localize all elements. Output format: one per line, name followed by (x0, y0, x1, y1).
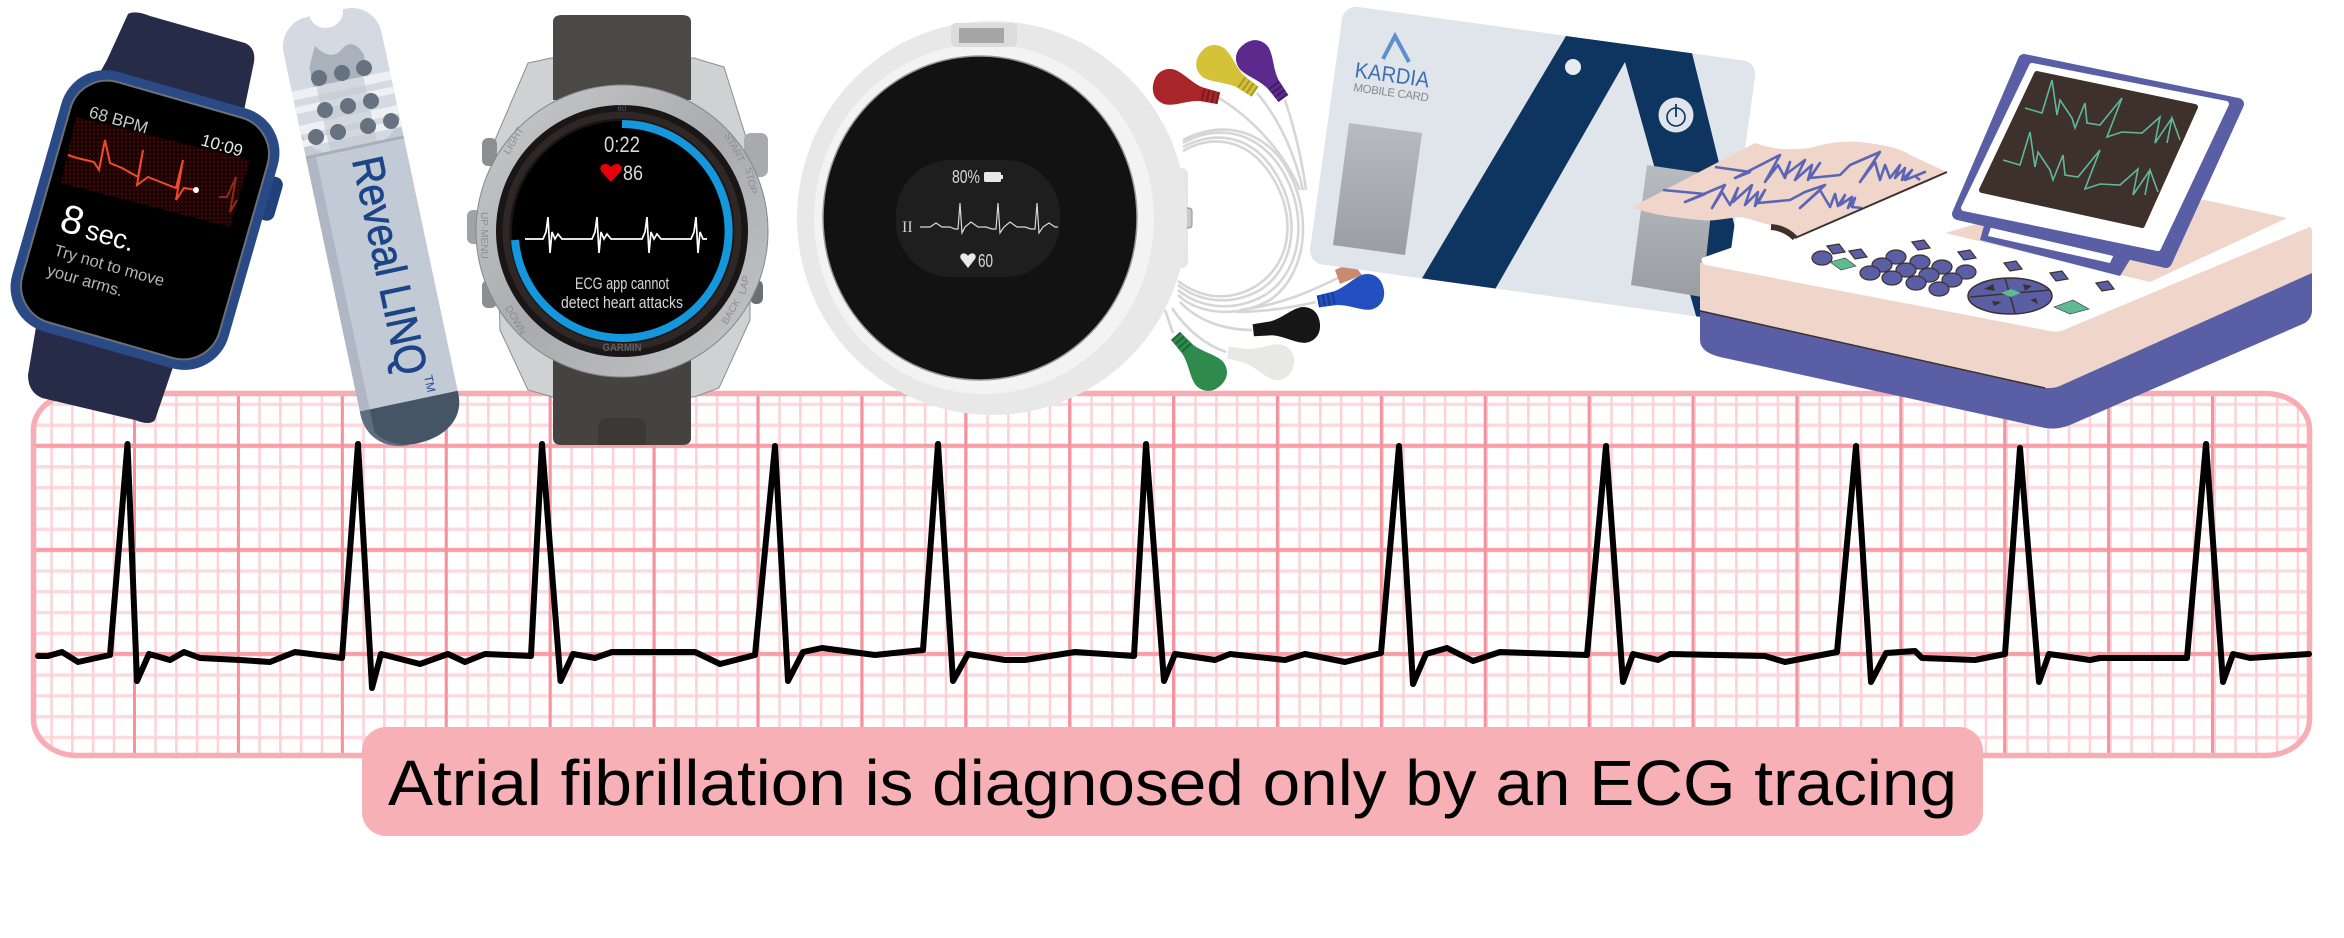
device: Garmin smartwatch: BACK (720, 297, 743, 326)
device: Kardia Mobile Card: MOBILE CARD (1353, 82, 1430, 105)
ECG trace: atrial fibrillation rhythm (38, 444, 2309, 688)
device: Garmin smartwatch: STOP (742, 166, 759, 195)
device: Apple Watch: sec. (82, 215, 138, 257)
device: Holter leads and cables (1149, 34, 1387, 398)
device: Garmin smartwatch: LAP (737, 274, 753, 296)
device: Garmin smartwatch: 0:22 (604, 132, 640, 157)
device: Garmin smartwatch: ECG app cannot (575, 274, 669, 293)
device: Garmin smartwatch: UP·MENU (478, 212, 489, 259)
device: Garmin smartwatch: 60 (618, 104, 627, 113)
lead: purple (1229, 34, 1298, 109)
green keys (1830, 258, 2089, 314)
lead: brown (1335, 262, 1362, 284)
device: round Holter ECG recorder (797, 21, 1192, 415)
printed paper (1632, 142, 1947, 238)
device: Garmin smartwatch: LIGHT (502, 125, 526, 156)
lead: black (1251, 305, 1322, 348)
caption: Atrial fibrillation is diagnosed only by an ECG tracing (388, 747, 1957, 819)
device: Reveal LINQ implantable monitor: TM (421, 374, 438, 394)
device: Reveal LINQ implantable monitor (277, 2, 467, 454)
device: Garmin smartwatch: GARMIN (602, 342, 642, 354)
device: Apple Watch: 8 (56, 196, 89, 245)
navigation dial (1968, 278, 2052, 314)
device: round Holter ECG recorder: 80% (952, 167, 980, 187)
lead: white (1224, 335, 1297, 383)
device: Garmin smartwatch: detect heart attacks (561, 293, 683, 312)
keypad (1812, 240, 2114, 296)
device: Reveal LINQ implantable monitor: Reveal LINQ (342, 152, 436, 379)
device: Garmin smartwatch (467, 15, 768, 445)
device: Apple Watch: 68 BPM (87, 103, 150, 138)
ECG paper strip with grid (30, 390, 2314, 760)
lead: green (1162, 324, 1234, 398)
device: Kardia Mobile Card (1310, 6, 1756, 317)
device: Apple Watch: 10:09 (199, 131, 245, 161)
device: round Holter ECG recorder: 60 (978, 251, 993, 271)
monitor (1958, 60, 2238, 262)
monitor stand (1980, 222, 2131, 276)
device: Kardia Mobile Card: KARDIA (1353, 57, 1431, 92)
lead: blue (1314, 271, 1387, 319)
device: Apple Watch (0, 12, 290, 423)
device: Garmin smartwatch: 86 (623, 162, 643, 185)
caption (362, 727, 1983, 836)
device: 12-lead ECG machine (1632, 60, 2312, 429)
device: Garmin smartwatch: START (721, 131, 746, 165)
lead: yellow (1190, 39, 1265, 106)
device: Apple Watch: your arms. (45, 262, 125, 300)
device: Garmin smartwatch: DOWN (502, 304, 528, 337)
device: Apple Watch: Try not to move (52, 242, 166, 290)
device: round Holter ECG recorder: II (902, 219, 913, 236)
lead: red (1149, 66, 1223, 116)
